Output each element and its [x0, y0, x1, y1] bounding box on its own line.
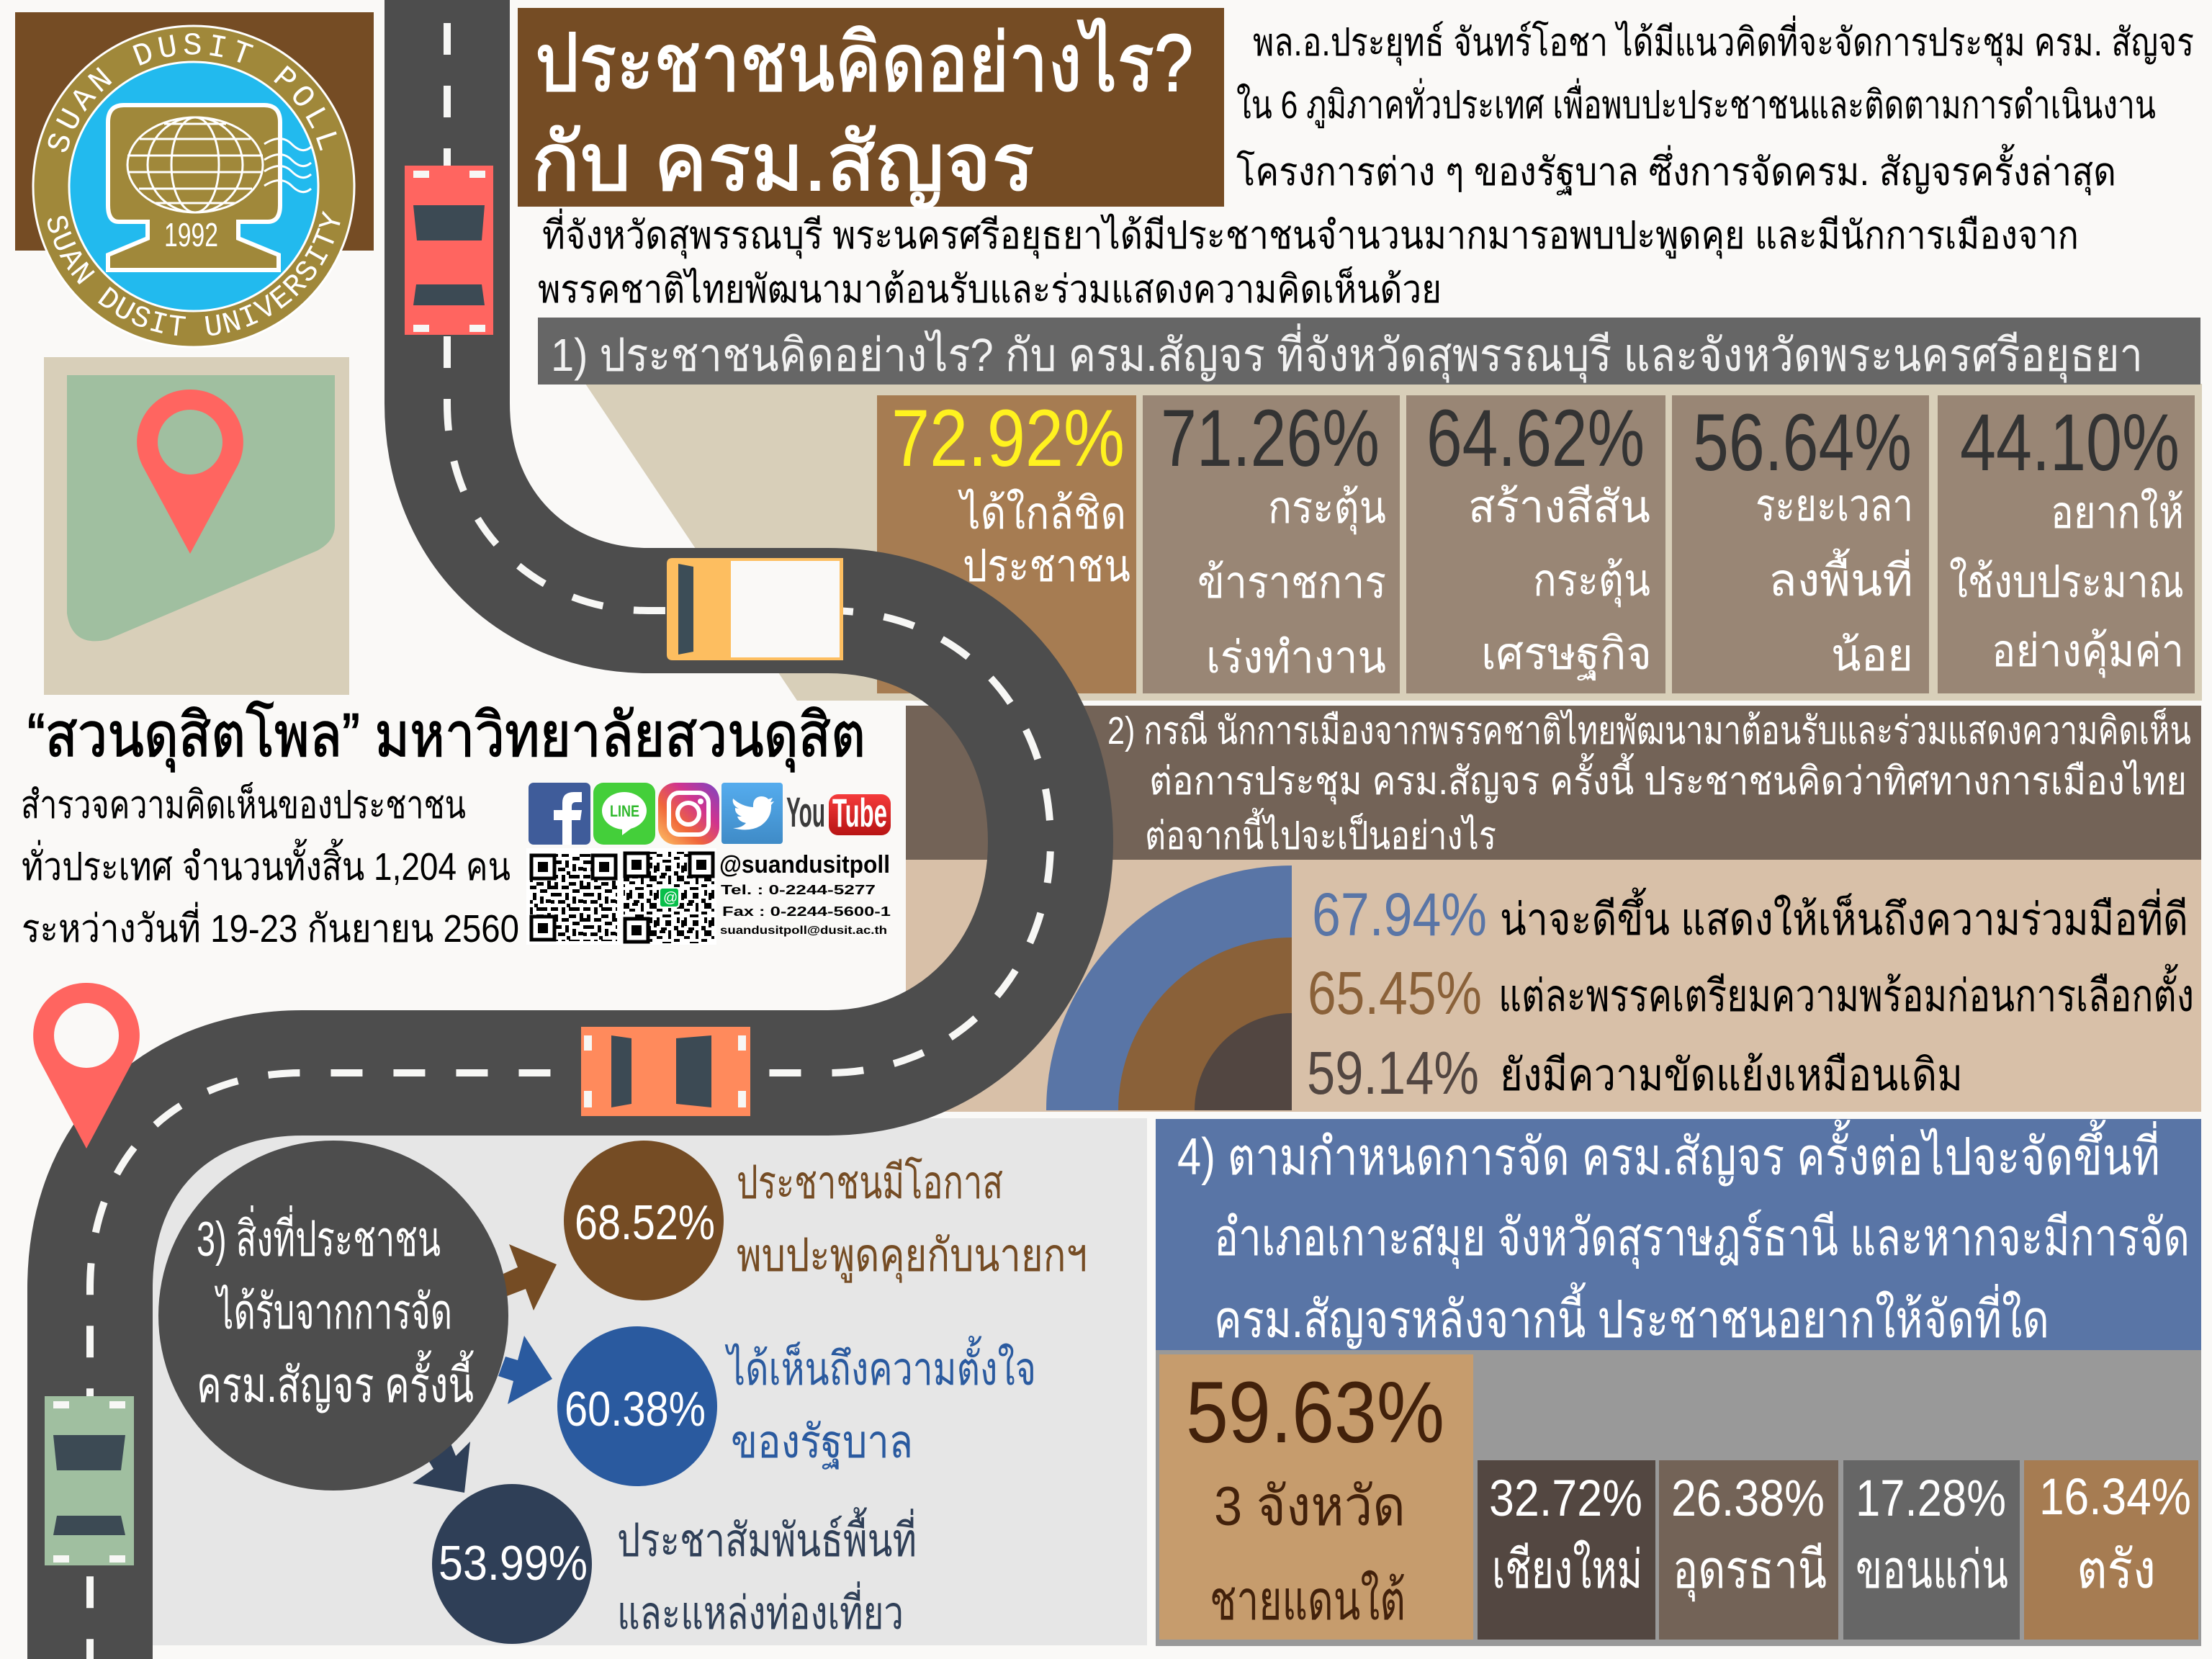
- stat: 71.26%: 71.26%: [1161, 393, 1380, 483]
- result: 59.14%: [1307, 1039, 1963, 1107]
- result: 67.94%: 67.94%: [1312, 881, 1487, 948]
- stat: 64.62%: [1426, 393, 1652, 680]
- stat: 16.34% Trang: 16.34%: [2039, 1469, 2191, 1526]
- callout: section 3 heading circle: 3) สิ่งที่ประชาชน: [197, 1205, 441, 1267]
- stat: 64.62%: สร้างสีสัน: [1468, 482, 1650, 532]
- icon: orange car: [581, 1027, 750, 1116]
- result: 67.94%: [1312, 881, 2188, 948]
- text block: contact details: @suandusitpoll: [719, 851, 890, 878]
- logo: Suan Dusit Poll seal: SUAN DUSIT POLL: [48, 33, 337, 153]
- icon: youtube: Tube: [832, 790, 887, 835]
- stat: 59.63% border provinces: 3 จังหวัด: [1214, 1476, 1406, 1537]
- text block: introduction: พรรคชาติไทยพัฒนามาต้อนรับและร่วมแสดงความคิดเห็นด้วย: [538, 266, 1442, 311]
- stat circle: 68.52%: พบปะพูดคุยกับนายกฯ: [737, 1229, 1087, 1283]
- result: 59.14%: ยังมีความขัดแย้งเหมือนเดิม: [1500, 1051, 1963, 1100]
- result: 59.14%: 59.14%: [1307, 1039, 1479, 1107]
- stat circle: 53.99%: 53.99%: [439, 1536, 588, 1591]
- icon: map pin: [137, 390, 243, 554]
- stat: 26.38% Udon Thani: อุดรธานี: [1673, 1539, 1827, 1602]
- stat: 17.28% Khon Kaen: ขอนแก่น: [1856, 1539, 2008, 1599]
- arrow: to 53.99%: [413, 1433, 470, 1493]
- icon: green car: [45, 1396, 134, 1565]
- icon: red car: [405, 166, 493, 335]
- panel: title: ประชาชนคิดอย่างไร?: [535, 18, 1193, 108]
- logo: Suan Dusit Poll seal: SUAN DUSIT UNIVERSITY: [48, 210, 341, 336]
- icon: instagram: [658, 783, 719, 845]
- text block: survey details: ทั่วประเทศ จำนวนทั้งสิ้น 1,204 คน: [22, 839, 511, 889]
- heading: survey source: “สวนดุสิตโพล” มหาวิทยาลัยสวนดุสิต: [27, 701, 866, 773]
- stat: 71.26%: เร่งทำงาน: [1206, 633, 1386, 683]
- callout: section 3 heading circle: [158, 1141, 508, 1491]
- icon: facebook: [529, 783, 590, 845]
- stat: 17.28% Khon Kaen: [1843, 1460, 2020, 1640]
- stat: 32.72% Chiang Mai: 32.72%: [1489, 1470, 1642, 1527]
- logo backing panel: [15, 12, 374, 251]
- panel: title: [518, 8, 1224, 209]
- QR codes: @: [663, 890, 678, 906]
- stat: 56.64%: ลงพื้นที่: [1768, 548, 1913, 606]
- stat: 64.62%: กระตุ้น: [1533, 556, 1650, 607]
- text block: contact details: Fax : 0-2244-5600-1: [722, 904, 891, 919]
- road: [90, 0, 1051, 1659]
- stat: 56.64%: 56.64%: [1693, 397, 1912, 487]
- stat: 59.63% border provinces: 59.63%: [1186, 1363, 1444, 1461]
- stat circle: 53.99%: ประชาสัมพันธ์พื้นที่: [617, 1507, 917, 1566]
- stat: 44.10%: [1949, 397, 2184, 678]
- result: 65.45%: 65.45%: [1308, 959, 1482, 1027]
- stat: 59.63% border provinces: [1159, 1354, 1473, 1640]
- stat: 26.38% Udon Thani: 26.38%: [1671, 1470, 1825, 1527]
- panel 3 background: [144, 1118, 1147, 1645]
- stat circle: 53.99%: และแหล่งท่องเที่ยว: [617, 1581, 904, 1639]
- stat: 64.62%: 64.62%: [1426, 393, 1645, 483]
- stat: 64.62%: เศรษฐกิจ: [1481, 629, 1652, 680]
- panel: title: กับ ครม.สัญจร: [531, 117, 1035, 209]
- text block: survey details: สำรวจความคิดเห็นของประชาชน: [21, 782, 466, 827]
- panel 1 background: [585, 384, 2202, 701]
- stat circle: 60.38%: 60.38%: [565, 1382, 706, 1437]
- stat: 72.92%: ประชาชน: [963, 541, 1130, 591]
- stat circle: 68.52%: [564, 1141, 1087, 1300]
- stat: 56.64%: ระยะเวลา: [1755, 481, 1913, 531]
- chart: nested quarter circles: [1046, 866, 1292, 1110]
- stat: 56.64%: น้อย: [1831, 631, 1913, 680]
- stat: 59.63% border provinces: ชายแดนใต้: [1210, 1570, 1406, 1632]
- callout: section 3 heading circle: ได้รับจากการจัด: [215, 1284, 452, 1339]
- icon: destination pin on road: [33, 983, 140, 1148]
- stat: 72.92%: ได้ใกล้ชิด: [958, 488, 1126, 539]
- stat: 26.38% Udon Thani: [1659, 1460, 1838, 1640]
- stat: 16.34% Trang: ตรัง: [2077, 1539, 2156, 1599]
- stat circle: 60.38%: ของรัฐบาล: [731, 1416, 913, 1470]
- QR codes: [526, 848, 716, 945]
- panel 2 background: [906, 706, 2201, 1112]
- text block: section 2 question: ต่อจากนี้ไปจะเป็นอย่างไร: [1145, 808, 1496, 858]
- text block: survey details: ระหว่างวันที่ 19-23 กันยายน 2560: [22, 902, 519, 950]
- stat circle: 60.38%: ได้เห็นถึงความตั้งใจ: [724, 1336, 1036, 1395]
- stat: 44.10%: อย่างคุ้มค่า: [1992, 626, 2184, 678]
- panel: section 4: [1156, 1119, 2201, 1646]
- stat: 71.26%: กระตุ้น: [1268, 483, 1386, 534]
- text block: introduction: โครงการต่าง ๆ ของรัฐบาล ซึ่งการจัดครม. สัญจรครั้งล่าสุด: [1236, 144, 2116, 196]
- stat: 16.34% Trang: [2024, 1460, 2198, 1640]
- callout: section 3 heading circle: ครม.สัญจร ครั้งนี้: [197, 1350, 474, 1413]
- text block: introduction: [538, 15, 2194, 311]
- logo: Suan Dusit Poll seal: 1992: [164, 216, 218, 253]
- icon: line: [593, 783, 655, 845]
- stat: 71.26%: ข้าราชการ: [1197, 558, 1386, 608]
- arrow: to 68.52%: [503, 1244, 557, 1310]
- stat boxes backing: [877, 395, 2195, 693]
- arrow: to 60.38%: [498, 1336, 552, 1404]
- stat: 71.26%: [1161, 393, 1386, 683]
- text block: contact details: suandusitpoll@dusit.ac.th: [720, 925, 887, 937]
- panel: map illustration: [44, 357, 349, 695]
- text block: section 2 question: [1107, 708, 2191, 858]
- text block: introduction: ที่จังหวัดสุพรรณบุรี พระนครศรีอยุธยาได้มีประชาชนจำนวนมากมารอพบปะพูดคุย และมีนักการเมืองจาก: [542, 208, 2079, 259]
- stat circle: 60.38%: [557, 1326, 1036, 1486]
- text block: contact details: Tel. : 0-2244-5277: [721, 883, 876, 897]
- icon: twitter: [721, 783, 783, 844]
- result: 65.45%: [1308, 959, 2194, 1027]
- stat circle: 68.52%: ประชาชนมีโอกาส: [737, 1156, 1003, 1208]
- text block: contact details: [719, 851, 891, 937]
- icon: line: LINE: [610, 802, 639, 820]
- text block: survey details: [21, 782, 519, 950]
- icon: yellow truck: [667, 558, 843, 660]
- stat: 72.92%: 72.92%: [891, 393, 1125, 483]
- stat: 32.72% Chiang Mai: [1478, 1460, 1655, 1640]
- logo: Suan Dusit Poll seal: [32, 24, 356, 346]
- stat: 56.64%: [1693, 397, 1913, 680]
- stat circle: 68.52%: 68.52%: [575, 1195, 715, 1250]
- stat: 72.92%: [891, 393, 1130, 591]
- stat: 17.28% Khon Kaen: 17.28%: [1856, 1470, 2006, 1527]
- stat: 32.72% Chiang Mai: เชียงใหม่: [1492, 1539, 1642, 1599]
- stat: 44.10%: อยากให้: [2051, 487, 2184, 538]
- stat circle: 53.99%: [432, 1484, 917, 1644]
- icon: youtube: You: [786, 789, 825, 836]
